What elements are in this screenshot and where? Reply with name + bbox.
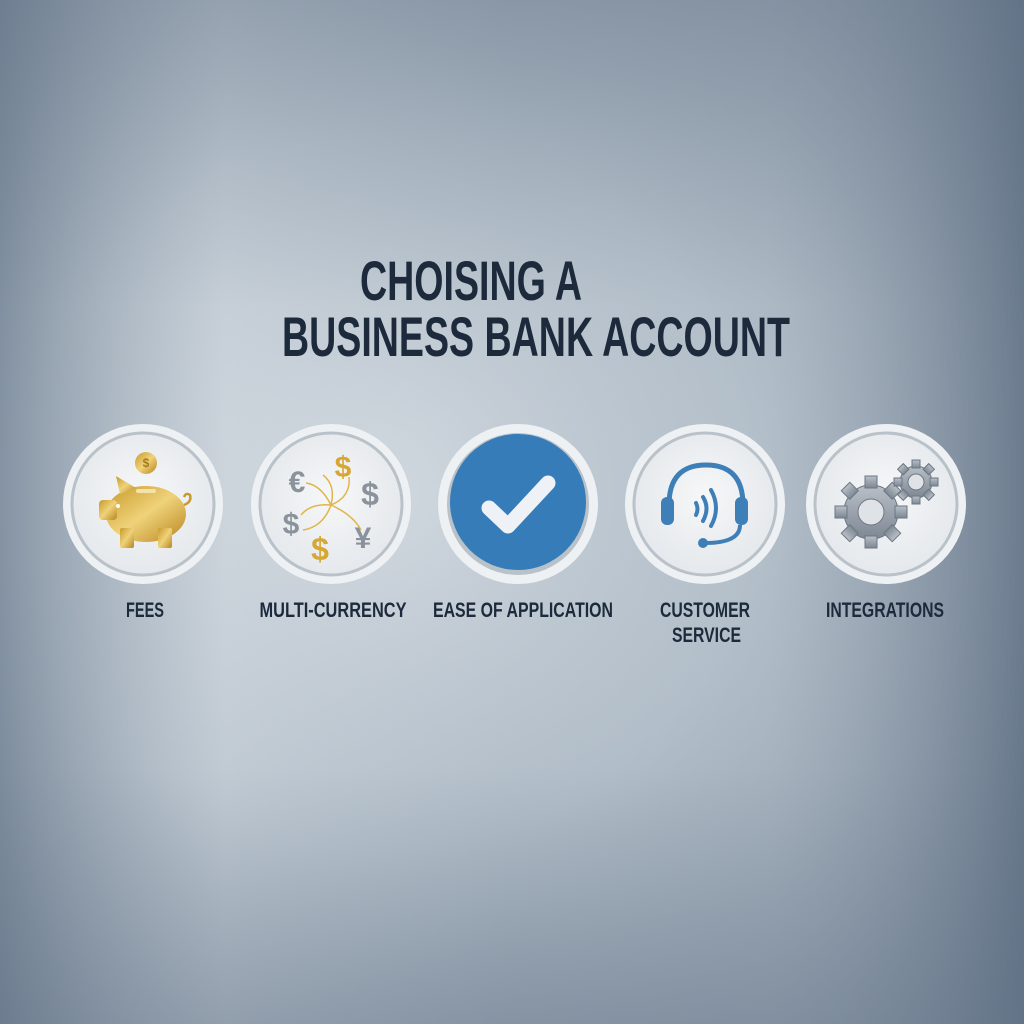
icon: currencies: ¥ (355, 522, 372, 555)
icon: currencies: $ (335, 451, 352, 484)
panel: integrations (806, 424, 966, 622)
panel: fees (63, 424, 223, 622)
panel: customer service (625, 424, 785, 647)
panel: fees: $ (143, 456, 150, 470)
title: CHOISING A (360, 249, 582, 312)
icon: checkmark (489, 483, 548, 526)
icon: currencies (283, 451, 379, 567)
label: integrations: INTEGRATIONS (826, 599, 944, 622)
icon: headset (661, 465, 748, 548)
label: multi-currency: MULTI-CURRENCY (260, 599, 406, 622)
icon: piggy bank (99, 452, 190, 548)
panel: ease of application (433, 424, 613, 622)
icon: currencies: € (289, 466, 306, 499)
icon: currencies: $ (283, 508, 300, 541)
label: customer service: SERVICE (672, 624, 741, 647)
label: customer service: CUSTOMER (660, 599, 750, 622)
icon: currencies: $ (311, 531, 329, 567)
label: ease of application: EASE OF APPLICATION (433, 599, 613, 622)
label: customer service (660, 599, 750, 647)
label: fees: FEES (126, 599, 164, 622)
title: BUSINESS BANK ACCOUNT (282, 305, 790, 368)
icon: currencies: $ (361, 476, 379, 512)
title (282, 249, 790, 368)
icon: gears (835, 460, 938, 548)
panel: multi-currency (251, 424, 411, 622)
